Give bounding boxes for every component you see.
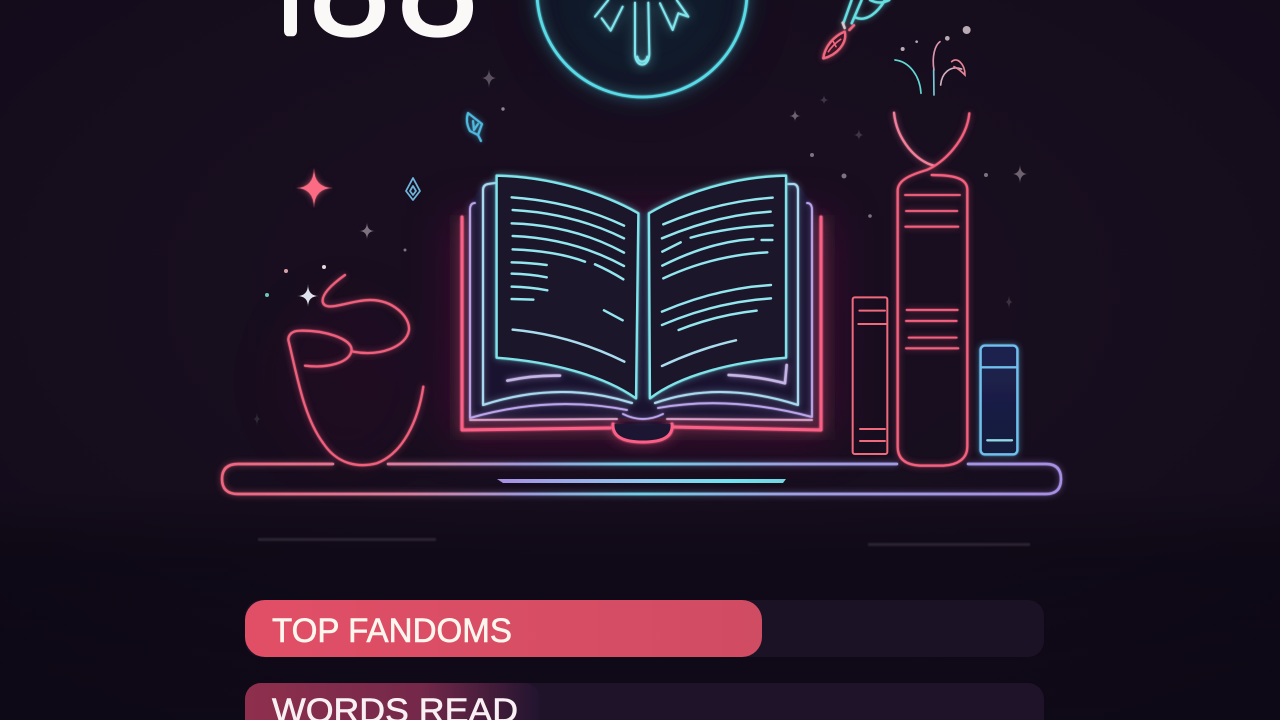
shelf highlight: [497, 479, 786, 483]
bar track: [245, 600, 1044, 657]
icon: sparks above tall book: [895, 26, 971, 95]
pink book cover: [462, 217, 821, 442]
back page fill: [470, 176, 812, 418]
icon: small floating blue page: [467, 113, 482, 141]
small red book: [853, 297, 887, 454]
icon: neon circle with quill: [537, 0, 747, 97]
illustration: shelf: [222, 464, 1061, 494]
main pages and text lines: [497, 176, 787, 398]
illustration: open book: [462, 176, 821, 442]
illustration: coffee cup: [288, 275, 423, 465]
tall pink book: [894, 113, 969, 466]
dim stars: [253, 68, 1028, 427]
second page layer: [483, 183, 798, 405]
stars and sparkles: [253, 68, 1028, 427]
headline number: [284, 0, 474, 38]
illustration: stacked books: [853, 113, 1017, 466]
icon: feather quill: [823, 0, 889, 58]
faint caption lines: [258, 538, 1030, 546]
lilac lower pages: [470, 203, 812, 420]
ambient glow behind book: [275, 0, 835, 465]
white star near cup: [297, 284, 319, 307]
left page: [497, 176, 638, 398]
text lines: [507, 197, 787, 383]
bar label: TOP FANDOMS: [272, 612, 512, 650]
panel: words read bar: [245, 683, 1044, 720]
right page: [649, 176, 786, 398]
pink star: [296, 168, 333, 208]
bar fill: [245, 600, 762, 657]
small dots: [265, 107, 988, 297]
bar fill: [245, 683, 540, 720]
icon: small blue gem: [406, 178, 420, 200]
panel: top fandoms bar: [245, 600, 1044, 657]
small blue book: [981, 346, 1017, 454]
bar track: [245, 683, 1044, 720]
